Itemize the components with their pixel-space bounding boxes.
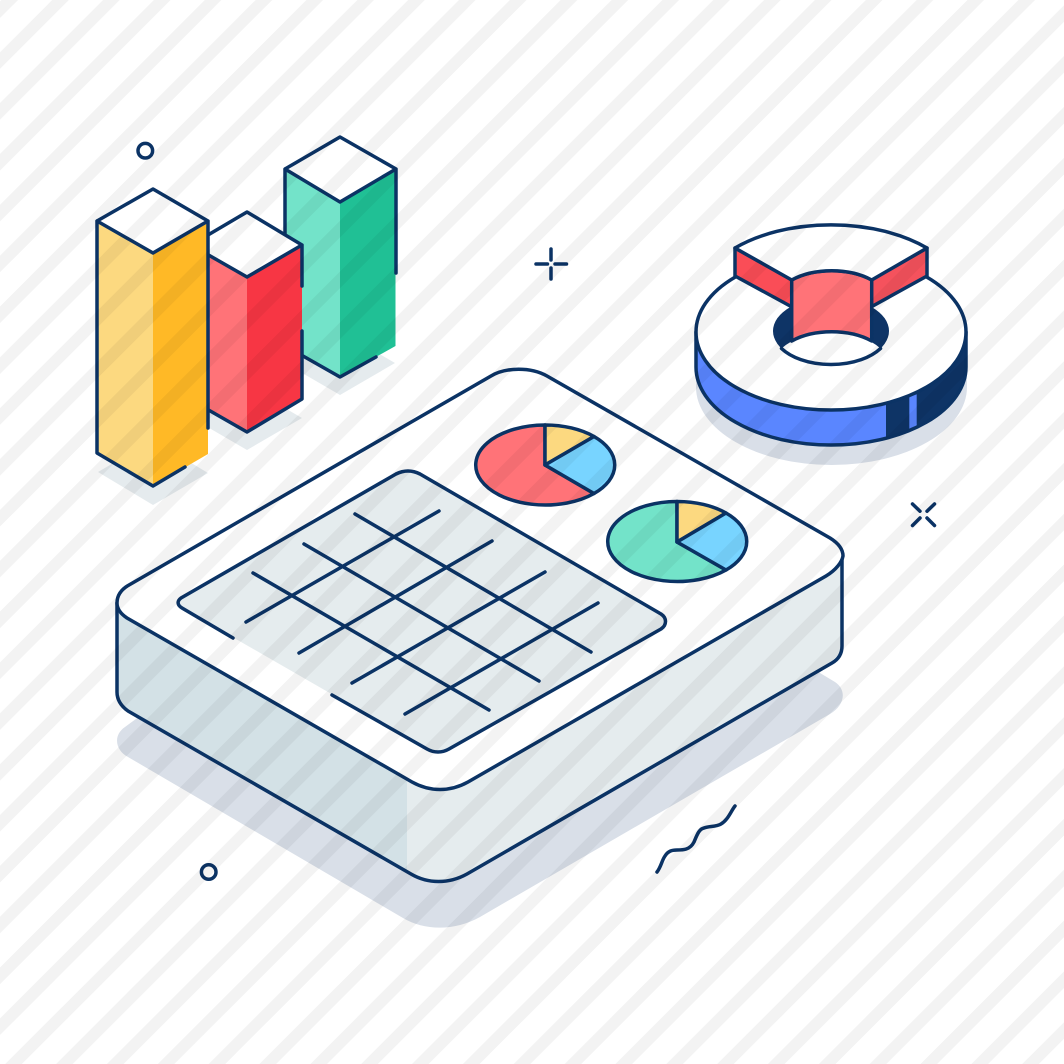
donut side band [696, 332, 966, 445]
icon: x sparkle [912, 504, 934, 526]
icon: plus sparkle [536, 249, 566, 279]
bar chart: isometric bars [97, 137, 396, 505]
raised donut segment [735, 225, 927, 341]
spreadsheet grid lines [246, 511, 598, 714]
bar shadows [98, 331, 395, 505]
base side faces [117, 555, 842, 882]
donut chart [696, 225, 967, 465]
base top face [117, 369, 843, 790]
base shadow [117, 670, 843, 928]
icon: squiggle [657, 806, 735, 872]
donut shadow [696, 340, 967, 465]
icon: small circle top left [138, 143, 153, 158]
pie chart: green [608, 501, 747, 581]
bar: yellow [97, 189, 208, 486]
icon: small circle bottom left [201, 865, 216, 879]
calculator base [117, 369, 843, 928]
donut hole [773, 298, 889, 365]
bar: red [191, 212, 302, 432]
pie chart: red [476, 425, 615, 505]
bar: green [285, 137, 396, 377]
donut top face [696, 254, 966, 410]
spreadsheet screen [178, 471, 666, 752]
